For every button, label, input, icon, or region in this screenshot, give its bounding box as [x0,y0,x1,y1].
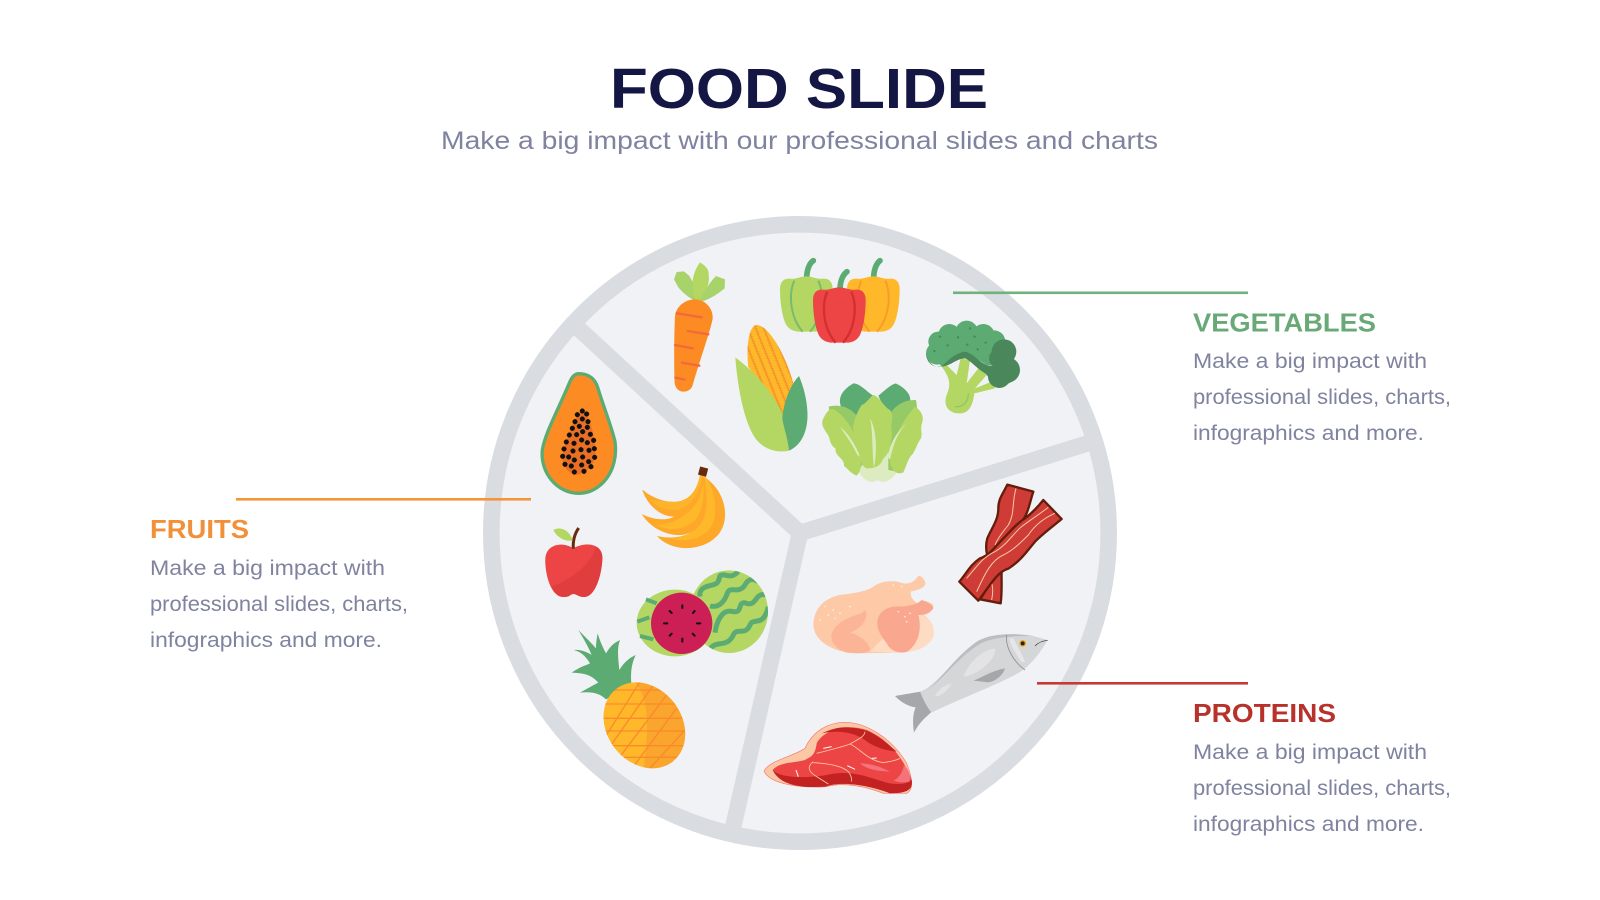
heading: vegetables: VEGETABLES [1193,308,1376,338]
icon: chicken [813,576,934,653]
text block: proteins: Make a big impact with [1193,741,1427,764]
text block: vegetables [1193,350,1451,445]
text block: proteins [1193,741,1451,836]
heading: proteins: PROTEINS [1193,698,1336,728]
connector: proteins [1037,682,1248,685]
icon: pineapple [572,630,686,768]
icon: banana [642,467,725,548]
infographic slide [151,68,1449,850]
text block: fruits: Make a big impact with [150,557,385,580]
text block: proteins: professional slides, charts, [1193,777,1451,800]
connector: vegetables [953,292,1248,294]
heading: fruits: FRUITS [150,514,249,544]
text block: vegetables: professional slides, charts, [1193,386,1451,409]
panel: fruits text [150,514,408,652]
icon: papaya [542,374,616,493]
panel: vegetables text [1193,308,1451,445]
icon: steak [764,722,912,793]
icon: watermelon [637,570,768,656]
icon: apple [545,528,602,597]
text block: fruits: infographics and more. [150,629,382,652]
text block: vegetables: infographics and more. [1193,422,1424,445]
icon: bell peppers [780,261,900,343]
plate rim [491,224,1109,842]
icon: corn [735,325,808,451]
icon: bacon [959,485,1062,603]
text block: fruits [150,557,408,652]
icon: carrot [674,262,725,392]
connector: fruits [236,498,531,501]
title: FOOD SLIDE [610,57,988,121]
text block: fruits: professional slides, charts, [150,593,408,616]
icon: fish [895,634,1048,733]
panel: proteins text [1193,698,1451,836]
text block: proteins: infographics and more. [1193,813,1424,836]
subtitle: Make a big impact with our professional slides and charts [441,127,1158,155]
text block: vegetables: Make a big impact with [1193,350,1427,373]
icon: lettuce [822,383,923,482]
plate dividers [578,328,1092,832]
panel: plate [491,224,1109,842]
icon: broccoli [926,321,1020,413]
